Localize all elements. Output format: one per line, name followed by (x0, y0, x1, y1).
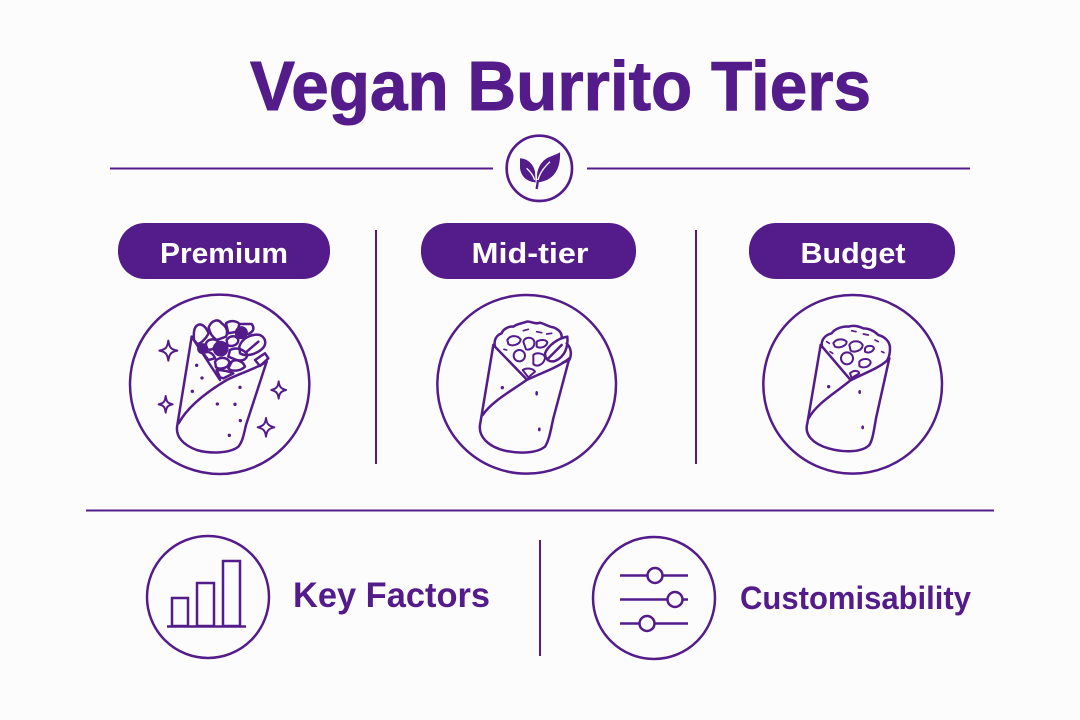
label: Customisability: Customisability (740, 580, 971, 616)
pill: Mid-tier (421, 223, 636, 279)
pill: Mid-tier: Mid-tier (472, 238, 588, 270)
panel: Customisability (593, 537, 971, 659)
pill: Premium (118, 223, 330, 279)
icon: bar chart (147, 536, 269, 658)
icon: leaf emblem (507, 136, 572, 201)
label: Key Factors: Key Factors (293, 576, 490, 615)
icon: budget burrito (763, 295, 942, 474)
pill: Budget: Budget (800, 238, 906, 270)
icon: sliders (593, 537, 715, 659)
panel: Key Factors (147, 536, 490, 658)
panel: Budget (749, 223, 955, 474)
pill: Premium: Premium (160, 238, 288, 270)
title: Vegan Burrito Tiers (250, 47, 871, 125)
panel: Premium tier (118, 223, 330, 474)
icon: premium burrito (130, 295, 309, 474)
pill: Budget (749, 223, 955, 279)
panel: Mid-tier (421, 223, 636, 474)
icon: mid-tier burrito (437, 295, 616, 474)
